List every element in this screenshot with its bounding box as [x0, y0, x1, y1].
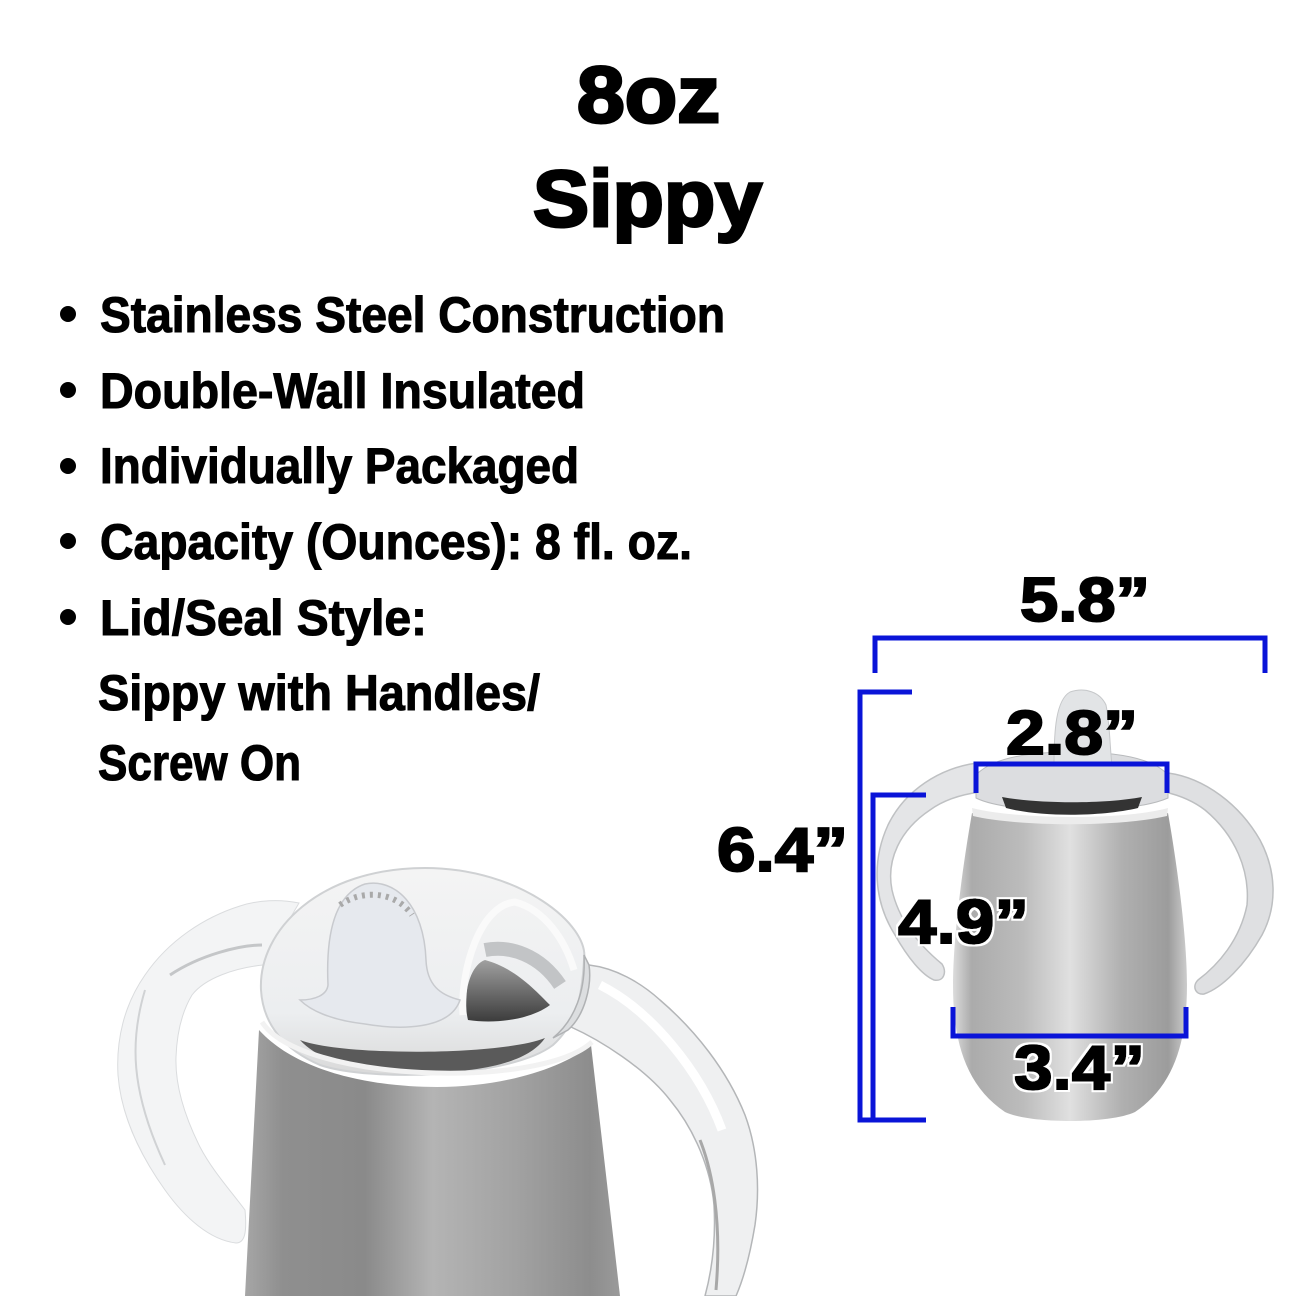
right handle [1165, 773, 1273, 994]
title: Sippy [533, 154, 763, 243]
lid bracket [976, 764, 1167, 793]
spout [300, 883, 460, 1027]
height bracket 6.4 [860, 692, 926, 1120]
feature list: Double-Wall Insulated [100, 363, 585, 419]
body [953, 813, 1187, 1121]
dark rim [1002, 797, 1142, 815]
feature list [60, 287, 725, 791]
dimension labels: 4.9” [898, 888, 1029, 957]
lid [976, 752, 1168, 811]
body bracket [953, 1007, 1186, 1036]
lid [261, 868, 584, 1075]
dimension labels: 2.8” [1006, 699, 1138, 768]
rim [972, 808, 1168, 824]
feature list: Lid/Seal Style: [100, 590, 427, 646]
right handle [571, 965, 758, 1296]
title: 8oz [577, 50, 720, 139]
spout [1054, 690, 1112, 765]
feature list: Sippy with Handles/ [98, 665, 540, 721]
dimension labels [717, 566, 1150, 1103]
feature list: Capacity (Ounces): 8 fl. oz. [100, 514, 692, 570]
feature list: Screw On [98, 735, 301, 791]
left handle [118, 901, 299, 1243]
small cup photo [877, 690, 1273, 1121]
rim shadow [300, 1038, 545, 1073]
left handle [877, 763, 980, 980]
height bracket 4.9 [873, 795, 926, 1120]
feature list: Individually Packaged [100, 438, 579, 494]
blue dimension brackets [860, 638, 1265, 1120]
title [533, 50, 763, 243]
body [245, 1030, 620, 1296]
width bracket [875, 638, 1265, 673]
dimension labels: 3.4” [1014, 1034, 1145, 1103]
dimension labels: 6.4” [717, 816, 848, 885]
large cup photo [118, 868, 758, 1296]
feature list: Stainless Steel Construction [100, 287, 725, 343]
handle socket [553, 955, 590, 1038]
lid opening [466, 960, 550, 1021]
dimension labels: 5.8” [1020, 566, 1150, 635]
